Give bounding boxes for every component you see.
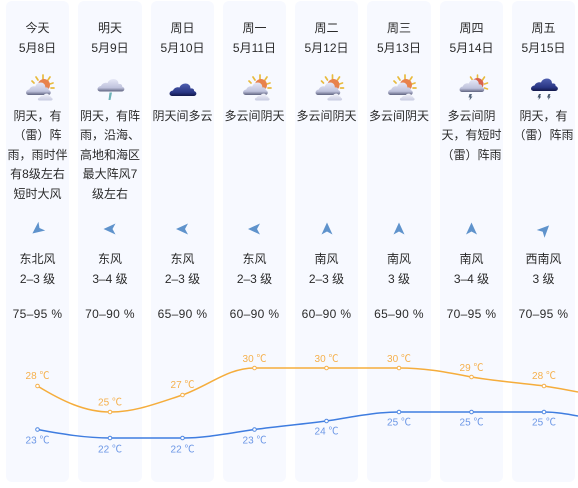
chart: high temperature line	[26, 354, 578, 414]
date heading: 周一	[242, 21, 266, 35]
wind	[309, 252, 344, 286]
wind: 东风	[242, 252, 266, 266]
weather description: 级左右	[92, 186, 128, 200]
wind: 东风	[170, 252, 194, 266]
weather description: 阴天，有	[13, 108, 62, 122]
humidity: 65–90 %	[374, 306, 424, 320]
icon: wind arrow southwest	[537, 222, 553, 238]
chart: low temperature line: 25 ℃	[532, 418, 556, 428]
date heading: 明天	[98, 21, 122, 35]
weather description: 多云间阴天	[224, 108, 284, 122]
weather description: 高地和海区	[80, 148, 140, 162]
date heading: 5月11日	[233, 40, 276, 54]
weather description: （雷）阵	[13, 128, 62, 142]
wind	[387, 252, 411, 286]
chart: high temperature line: 25 ℃	[98, 398, 122, 408]
panel: Monday May 11	[223, 1, 286, 482]
date heading	[449, 21, 494, 54]
wind	[237, 252, 272, 286]
date heading	[377, 21, 421, 54]
date heading: 5月10日	[160, 40, 205, 54]
weather description: 雨，雨时伴	[7, 148, 68, 162]
date heading: 5月8日	[19, 40, 56, 54]
wind: 2–3 级	[20, 272, 55, 286]
chart: low temperature line: 24 ℃	[315, 426, 338, 438]
panel: tomorrow May 9	[78, 1, 142, 482]
icon: wind arrow south, May 14	[466, 222, 477, 234]
chart: low temperature line: 23 ℃	[26, 436, 49, 446]
weather description: 天，有短时	[441, 128, 502, 142]
humidity: 60–90 %	[302, 306, 351, 320]
date heading	[91, 21, 129, 54]
weather description: 短时大风	[13, 186, 62, 200]
chart: low temperature line: 25 ℃	[460, 418, 483, 428]
wind: 3 级	[532, 272, 554, 286]
date heading: 周日	[170, 21, 194, 35]
date heading	[19, 21, 56, 54]
weather description: 多云间阴天	[296, 108, 356, 122]
weather description	[80, 108, 140, 200]
date heading	[304, 21, 349, 54]
icon: partly cloudy, May 11	[243, 75, 271, 100]
weather description: 雨，沿海、	[80, 128, 140, 142]
chart: high temperature line: 28 ℃	[532, 371, 556, 382]
date heading: 周四	[459, 21, 484, 35]
panel: Friday May 15	[512, 1, 575, 482]
chart: high temperature line: 28 ℃	[26, 371, 49, 382]
date heading	[521, 21, 566, 54]
wind: 南风	[387, 252, 411, 266]
wind: 3–4 级	[454, 272, 489, 286]
date heading	[160, 21, 205, 54]
humidity: 70–95 %	[519, 306, 568, 320]
humidity: 65–90 %	[158, 306, 207, 320]
wind: 东北风	[19, 252, 56, 266]
panel: today May 8	[6, 1, 69, 482]
chart: high temperature line: 29 ℃	[460, 363, 483, 374]
weather description	[7, 108, 68, 200]
wind: 西南风	[525, 252, 562, 266]
wind: 南风	[314, 252, 338, 266]
chart: low temperature line	[26, 410, 578, 456]
panel: Thursday May 14	[440, 1, 503, 482]
panel: Tuesday May 12	[295, 1, 358, 482]
icon: wind arrow east, May 11	[248, 224, 260, 234]
weather description: 多云间阴天	[369, 108, 429, 122]
icon: cloud with shower, May 9	[98, 79, 124, 100]
icon: partly cloudy, May 12	[316, 75, 344, 100]
humidity: 75–95 %	[13, 306, 62, 320]
humidity: 60–90 %	[230, 306, 279, 320]
wind: 2–3 级	[237, 272, 272, 286]
icon: wind arrow northeast	[29, 222, 45, 238]
chart: low temperature line: 25 ℃	[387, 418, 411, 428]
chart: high temperature line: 30 ℃	[315, 354, 338, 365]
date heading: 周三	[387, 21, 411, 35]
date heading: 5月14日	[449, 40, 494, 54]
date heading: 5月12日	[304, 40, 349, 54]
icon: wind arrow south, May 12	[322, 222, 332, 234]
weather description: （雷）阵雨	[441, 148, 502, 162]
wind: 2–3 级	[165, 272, 200, 286]
date heading: 今天	[25, 21, 50, 35]
weather description: 阴天间多云	[152, 108, 212, 122]
icon: partly cloudy, May 13	[388, 75, 416, 100]
chart: high temperature line: 27 ℃	[171, 380, 194, 391]
wind: 东风	[98, 252, 122, 266]
icon: wind arrow east, May 9	[104, 224, 116, 234]
humidity: 70–90 %	[85, 306, 135, 320]
wind: 3–4 级	[92, 272, 128, 286]
chart: low temperature line: 22 ℃	[171, 444, 194, 456]
weather description: （雷）阵雨	[513, 128, 574, 142]
wind: 2–3 级	[309, 272, 344, 286]
weather description: 阴天，有阵	[80, 108, 140, 122]
panel: Sunday May 10	[151, 1, 214, 482]
date heading: 周二	[314, 21, 338, 35]
chart: low temperature line: 23 ℃	[243, 436, 266, 446]
date heading: 5月13日	[377, 40, 421, 54]
wind: 3 级	[388, 272, 410, 286]
wind	[454, 252, 489, 286]
date heading: 5月15日	[521, 40, 566, 54]
icon: wind arrow south, May 13	[394, 222, 404, 234]
chart: high temperature line: 30 ℃	[387, 354, 411, 365]
wind	[525, 252, 562, 286]
chart: low temperature line: 22 ℃	[98, 444, 122, 456]
chart: high temperature line: 30 ℃	[243, 354, 266, 365]
date heading: 5月9日	[91, 40, 129, 54]
panel: Wednesday May 13	[367, 1, 431, 482]
weather description: 阴天，有	[519, 108, 568, 122]
wind	[92, 252, 128, 286]
weather description: 有8级左右	[10, 167, 65, 181]
icon: dark cloud, May 10	[170, 83, 196, 96]
icon: partly cloudy, May 8	[26, 75, 54, 100]
humidity: 70–95 %	[447, 306, 496, 320]
icon: sun and cloud with thunder shower, May 14	[460, 75, 488, 100]
date heading	[233, 21, 276, 54]
wind	[165, 252, 200, 286]
icon: dark cloud with thunder shower, May 15	[531, 78, 558, 100]
icon: wind arrow east, May 10	[176, 224, 188, 234]
wind: 南风	[459, 252, 484, 266]
weather description: 最大阵风7	[83, 167, 137, 181]
weather description	[441, 108, 502, 162]
wind	[19, 252, 56, 286]
weather description: 多云间阴	[447, 108, 496, 122]
date heading: 周五	[531, 21, 556, 35]
weather description	[513, 108, 574, 142]
